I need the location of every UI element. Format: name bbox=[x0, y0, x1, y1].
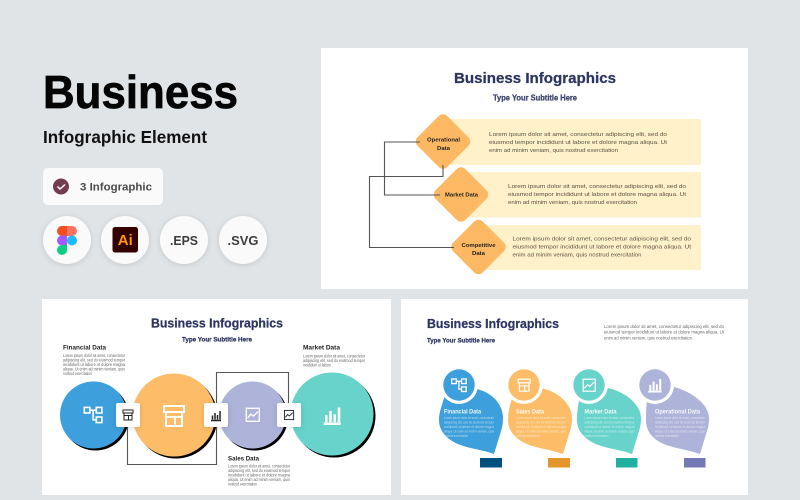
pin: market data: aliqua. Ut enim ad minim veniam, quis bbox=[584, 430, 635, 434]
text: market data: incididunt ut labore bbox=[303, 362, 332, 368]
pin: sales data: nostrud exercitation bbox=[516, 434, 540, 438]
pin: operational data bbox=[636, 366, 709, 468]
row: market data: enim ad minim veniam, quis nostrud exercitation bbox=[508, 200, 637, 206]
pin: operational data: adipiscing elit, sed do eiusmod tempor bbox=[655, 420, 706, 424]
icon: Adobe Illustrator bbox=[101, 216, 149, 264]
pin: financial data: incididunt ut labore et dolore magna bbox=[444, 425, 494, 429]
pin: operational data: aliqua. Ut enim ad minim veniam, quis bbox=[655, 430, 705, 434]
row: market data: Lorem ipsum dolor sit amet, consectetur adipiscing elit, sed do bbox=[508, 184, 686, 190]
pin: sales data bbox=[505, 366, 572, 468]
text: market data: Lorem ipsum dolor sit amet, consectetur bbox=[303, 354, 366, 358]
pin: market data: Lorem ipsum dolor sit amet, consectetur bbox=[584, 416, 635, 420]
connector lines bbox=[370, 142, 454, 248]
text: financial data: adipiscing elit, sed do eiusmod tempor bbox=[63, 358, 126, 362]
panel subtitle: Type Your Subtitle Here bbox=[182, 336, 252, 344]
text: sales data bbox=[228, 456, 291, 486]
panel paragraph: Lorem ipsum dolor sit amet, consectetur adipiscing elit, sed do bbox=[604, 324, 725, 329]
text: market data bbox=[303, 344, 366, 368]
row: operational data: eiusmod tempor incididunt ut labore et dolore magna aliqua. Ut bbox=[489, 140, 667, 146]
badge: 3 Infographic: 3 Infographic bbox=[80, 182, 152, 194]
pin: market data: adipiscing elit, sed do eiusmod tempor bbox=[584, 420, 635, 424]
row: competitive data: enim ad minim veniam, quis nostrud exercitation bbox=[512, 252, 642, 258]
circle: sales bbox=[132, 374, 218, 458]
pin: financial data: Lorem ipsum dolor sit amet, consectetur bbox=[444, 416, 495, 420]
panel title: Business Infographics bbox=[151, 316, 283, 330]
text: sales data: Lorem ipsum dolor sit amet, consectetur bbox=[228, 464, 291, 468]
row: competitive data: eiusmod tempor incididunt ut labore et dolore magna aliqua. Ut bbox=[512, 244, 691, 250]
connector lines bbox=[128, 372, 288, 464]
text: financial data bbox=[63, 344, 126, 376]
row: operational data: Data bbox=[437, 146, 451, 152]
main title: Business bbox=[43, 66, 238, 118]
pin: sales data: aliqua. Ut enim ad minim veniam, quis bbox=[516, 430, 566, 434]
icon: EPS bbox=[160, 216, 208, 264]
panel subtitle: Type Your Subtitle Here bbox=[493, 94, 578, 102]
row: operational data: enim ad minim veniam, quis nostrud exercitation bbox=[489, 148, 618, 154]
panel: circles bbox=[42, 299, 391, 495]
text: sales data: aliqua. Ut enim ad minim veniam, quis bbox=[228, 477, 290, 482]
text: sales data: adipiscing elit, sed do eiusmod tempor bbox=[228, 468, 291, 473]
circle: market bbox=[219, 382, 288, 450]
card: bars icon bbox=[204, 403, 228, 427]
pin: sales data: incididunt ut labore et dolore magna bbox=[516, 425, 566, 429]
row: market data: Market Data bbox=[445, 193, 479, 199]
pin: financial data: Financial Data bbox=[444, 408, 481, 416]
row: competitive data: Competitive bbox=[462, 243, 496, 249]
pin: financial data: nostrud exercitation bbox=[444, 434, 468, 438]
pin: operational data: Lorem ipsum dolor sit amet, consectetur bbox=[655, 416, 706, 420]
icon: SVG: .SVG bbox=[228, 234, 258, 248]
panel paragraph bbox=[604, 324, 725, 340]
panel subtitle: Type Your Subtitle Here bbox=[427, 338, 495, 344]
text: financial data: nostrud exercitation bbox=[63, 371, 93, 376]
pin: sales data: adipiscing elit, sed do eiusmod tempor bbox=[516, 420, 567, 424]
pin: financial data: adipiscing elit, sed do eiusmod tempor bbox=[444, 420, 495, 424]
text: financial data: Lorem ipsum dolor sit amet, consectetur bbox=[63, 353, 126, 358]
row: market data bbox=[431, 165, 701, 224]
pin: sales data: Lorem ipsum dolor sit amet, consectetur bbox=[516, 416, 567, 420]
text: sales data: nostrud exercitation bbox=[228, 482, 258, 486]
panel title: Business Infographics bbox=[454, 70, 616, 87]
card: store icon bbox=[116, 403, 140, 427]
panel paragraph: eiusmod tempor incididunt ut labore et dolore magna aliqua. Ut bbox=[604, 330, 725, 334]
badge: 3 Infographic bbox=[43, 168, 163, 205]
text: sales data: incididunt ut labore et dolore magna bbox=[228, 472, 291, 478]
icon: Adobe Illustrator: Ai bbox=[118, 232, 133, 249]
panel: diamonds bbox=[321, 48, 748, 289]
row: competitive data: Lorem ipsum dolor sit amet, consectetur adipiscing elit, sed do bbox=[512, 236, 691, 242]
pin: operational data: Operational Data bbox=[655, 408, 700, 416]
icon: EPS: .EPS bbox=[170, 234, 198, 248]
pin: market data: Market Data bbox=[584, 408, 617, 416]
text: market data: adipiscing elit, sed do eiusmod tempor bbox=[303, 358, 366, 363]
circle: financial bbox=[60, 382, 129, 450]
row: operational data: Lorem ipsum dolor sit amet, consectetur adipiscing elit, sed do bbox=[489, 132, 667, 138]
row: operational data: Operational bbox=[427, 138, 461, 144]
icon: SVG bbox=[219, 216, 267, 264]
pin: operational data: nostrud exercitation bbox=[655, 434, 679, 438]
pin: financial data bbox=[439, 366, 503, 468]
pin: market data: incididunt ut labore et dolore magna bbox=[584, 425, 635, 429]
card: chart icon bbox=[277, 403, 301, 427]
pin: operational data: incididunt ut labore et dolore magna bbox=[655, 425, 705, 429]
pin: market data: nostrud exercitation bbox=[584, 434, 609, 438]
text: sales data: Sales Data bbox=[228, 456, 259, 462]
pin: market data bbox=[570, 366, 641, 468]
circle: operational bbox=[290, 372, 376, 458]
row: competitive data: Data bbox=[472, 251, 486, 257]
row: market data: eiusmod tempor incididunt ut labore et dolore magna aliqua. Ut bbox=[508, 192, 686, 198]
pin: sales data: Sales Data bbox=[516, 408, 544, 416]
heading block bbox=[43, 66, 238, 147]
panel paragraph: enim ad minim veniam, quis nostrud exercitation bbox=[604, 336, 693, 340]
icon: Figma bbox=[43, 216, 91, 264]
text: financial data: Financial Data bbox=[63, 344, 106, 352]
text: financial data: incididunt ut labore et dolore magna bbox=[63, 362, 126, 367]
panel: pins bbox=[401, 299, 748, 495]
text: financial data: aliqua. Ut enim ad minim veniam, quis bbox=[63, 366, 125, 372]
text: market data: Market Data bbox=[303, 344, 340, 352]
row: operational data bbox=[413, 112, 701, 171]
row: competitive data bbox=[449, 217, 701, 277]
pin: financial data: aliqua. Ut enim ad minim veniam, quis bbox=[444, 430, 494, 434]
panel title: Business Infographics bbox=[427, 317, 559, 331]
subtitle: Infographic Element bbox=[43, 127, 207, 147]
